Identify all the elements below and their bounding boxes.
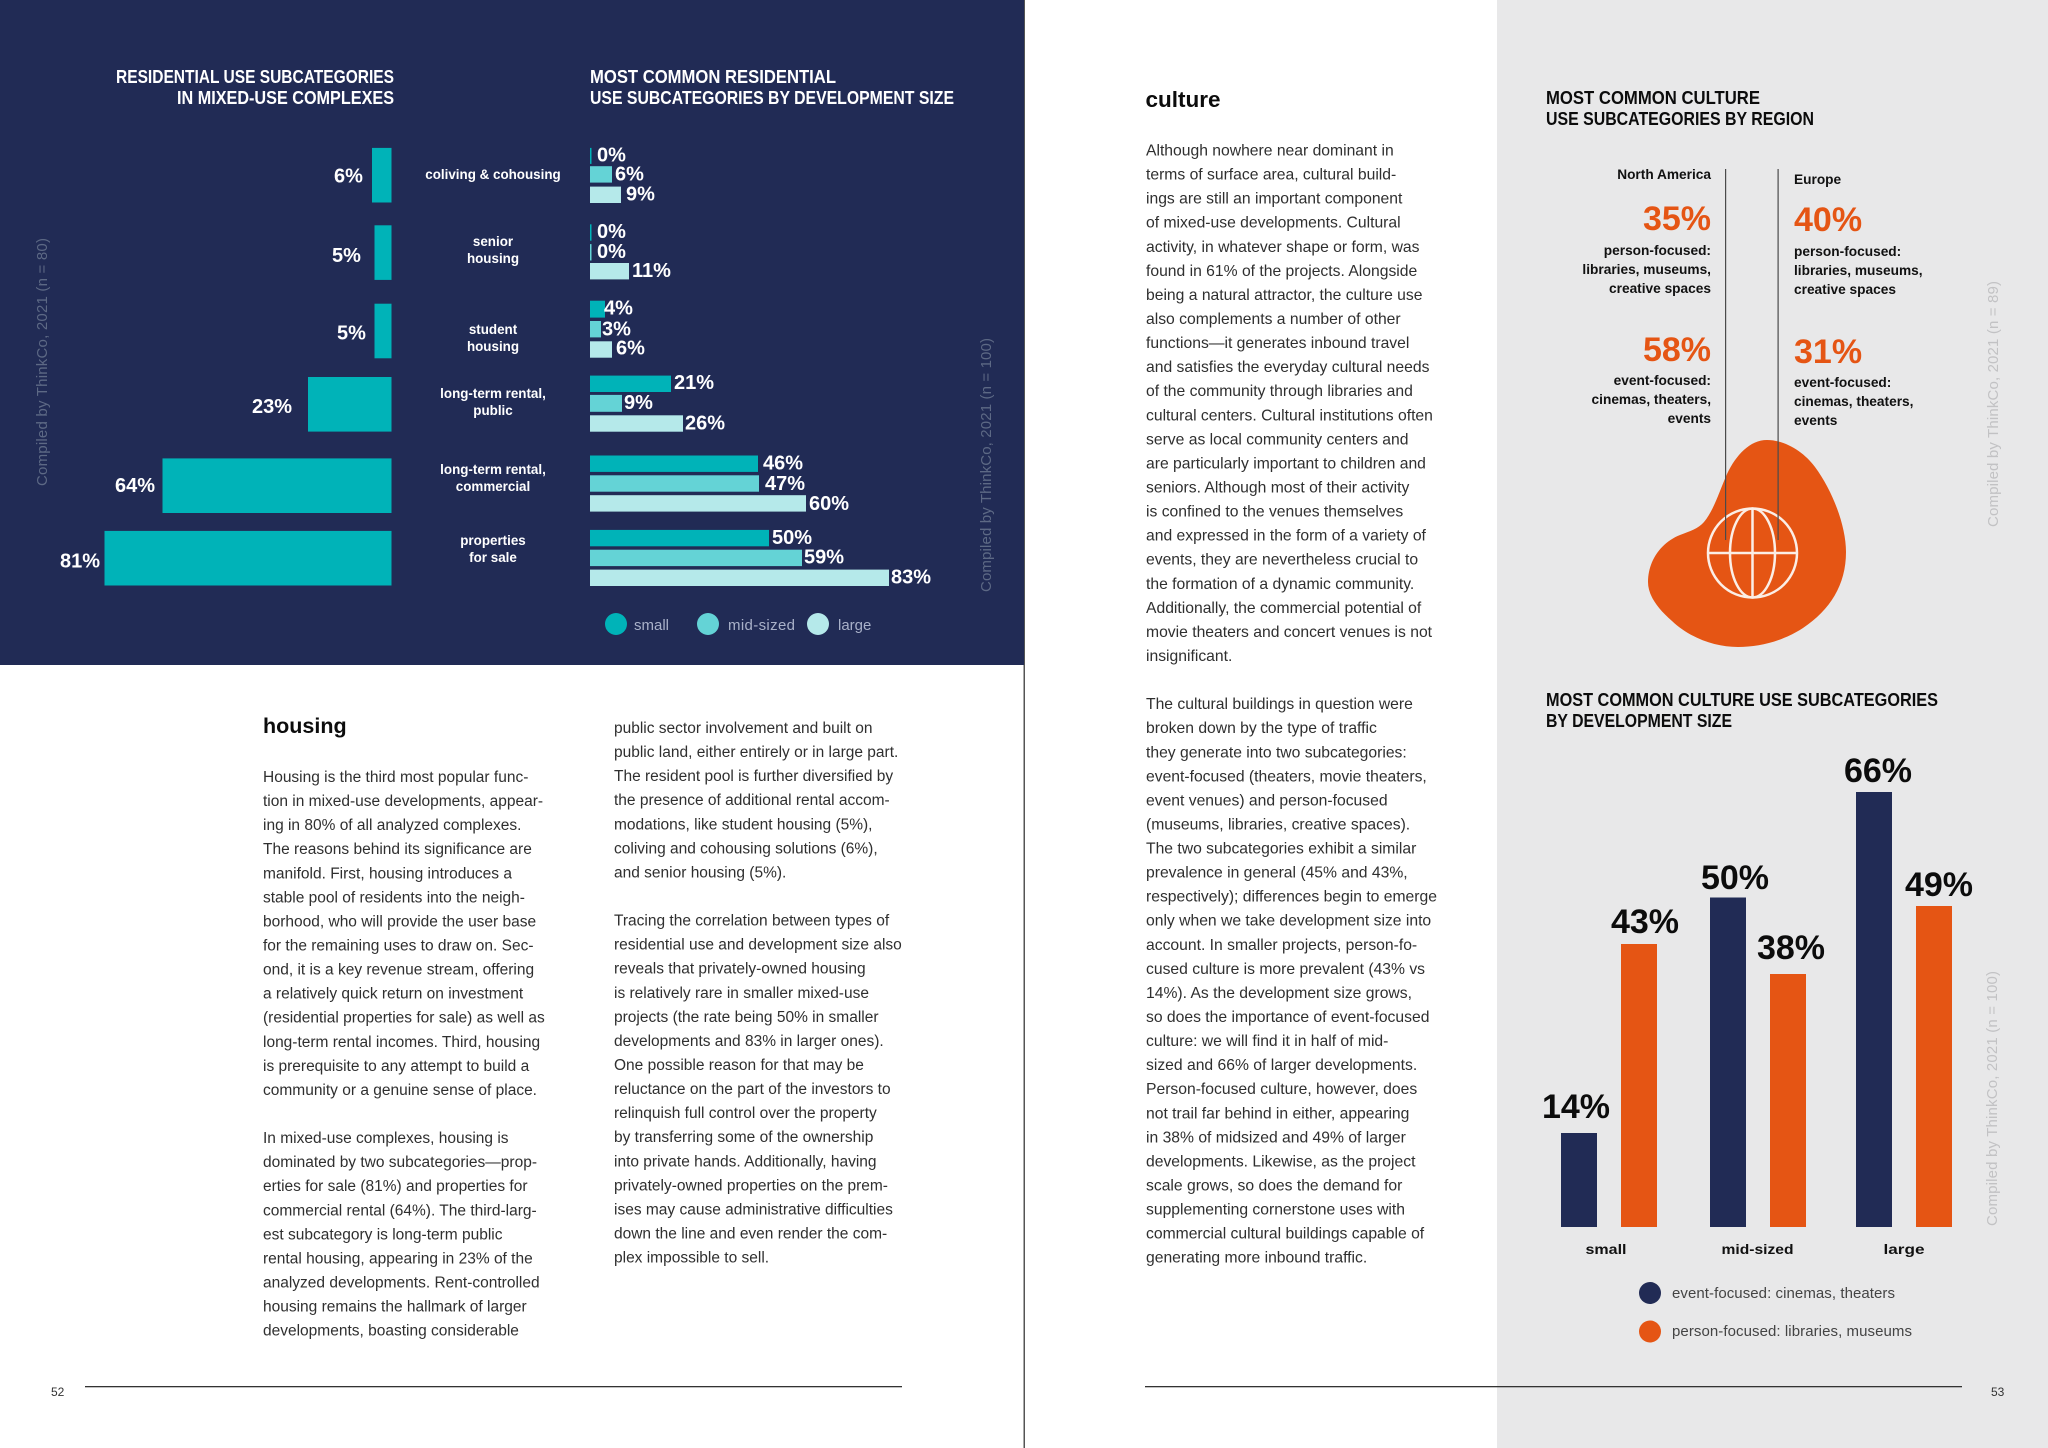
text block: housing first column: rental housing, appearing in 23% of the <box>263 1250 533 1267</box>
text block: housing first column: The reasons behind its significance are <box>263 841 532 858</box>
text block: housing first column: long-term rental incomes. Third, housing <box>263 1034 540 1051</box>
text block: culture: and expressed in the form of a variety of <box>1146 528 1427 545</box>
category labels: housing <box>467 339 519 354</box>
text block: housing first column: stable pool of residents into the neigh- <box>263 889 525 906</box>
text block: housing first column: housing remains the hallmark of larger <box>263 1299 527 1316</box>
panel: culture by development size <box>1542 690 2001 1342</box>
text block: housing second column: the presence of additional rental accom- <box>614 792 890 809</box>
column: North America: libraries, museums, <box>1582 262 1711 277</box>
grouped bar chart: by development size: 6% <box>616 337 645 359</box>
text block: culture: they generate into two subcategories: <box>1146 744 1407 761</box>
text block: housing second column: into private hands. Additionally, having <box>614 1153 877 1170</box>
footer right: page 53: 53 <box>1991 1385 2005 1399</box>
text block: culture: Person-focused culture, however, does <box>1146 1081 1417 1098</box>
text block: housing first column: manifold. First, housing introduces a <box>263 865 512 882</box>
column: North America: 35% <box>1643 200 1711 238</box>
column: North America: event-focused: <box>1614 373 1711 388</box>
text block: housing first column: community or a genuine sense of place. <box>263 1082 537 1099</box>
text block: culture: Additionally, the commercial potential of <box>1146 600 1422 617</box>
grouped bar chart: by development size: 60% <box>809 493 849 515</box>
text block: housing first column: commercial rental (64%). The third-larg- <box>263 1202 537 1219</box>
column: Europe: events <box>1794 413 1838 428</box>
source note: Compiled by ThinkCo, 2021 (n = 100) <box>1984 971 2001 1226</box>
text block: culture: sized and 66% of larger developments. <box>1146 1057 1417 1074</box>
bar chart: event vs person focused: 14% <box>1542 1088 1610 1126</box>
legend: development size: small <box>634 617 669 634</box>
grouped bar chart: by development size: 59% <box>804 547 844 569</box>
text block: culture: is confined to the venues themselves <box>1146 504 1403 521</box>
bar chart: residential subcategories overall: 5% <box>332 245 361 267</box>
column: Europe <box>1794 172 1923 428</box>
grouped bar chart: by development size: 0% <box>597 145 626 167</box>
grouped bar chart: by development size: 3% <box>602 318 631 340</box>
bar chart: event vs person focused: 66% <box>1844 752 1912 790</box>
text block: culture: developments. Likewise, as the project <box>1146 1153 1416 1170</box>
heading: culture: culture <box>1146 87 1221 112</box>
blob with globe icon <box>1648 440 1846 647</box>
grouped bar chart: by development size: 9% <box>626 183 655 205</box>
text block: housing second column: Tracing the correlation between types of <box>614 913 890 930</box>
text block: culture: account. In smaller projects, person-fo- <box>1146 937 1417 954</box>
legend: development size: large <box>838 617 871 634</box>
text block: culture: event-focused (theaters, movie theaters, <box>1146 768 1427 785</box>
text block: housing second column: privately-owned properties on the prem- <box>614 1177 888 1194</box>
grouped bar chart: by development size: 26% <box>685 413 725 435</box>
text block: culture: broken down by the type of traffic <box>1146 720 1377 737</box>
text block: housing second column: public land, either entirely or in large part. <box>614 744 898 761</box>
text block: culture: only when we take development size into <box>1146 913 1431 930</box>
text block: housing second column: by transferring some of the ownership <box>614 1129 873 1146</box>
grouped bar chart: by development size: 21% <box>674 372 714 394</box>
text block: culture: (museums, libraries, creative spaces). <box>1146 816 1410 833</box>
grouped bar chart: by development size: 4% <box>604 298 633 320</box>
heading: culture by development size <box>1546 690 1938 731</box>
text block: housing first column: ond, it is a key revenue stream, offering <box>263 962 534 979</box>
bar chart: event vs person focused: 38% <box>1757 929 1825 967</box>
text block: housing second column: coliving and cohousing solutions (6%), <box>614 840 878 857</box>
category labels: public <box>473 403 513 418</box>
text block: culture: the formation of a dynamic community. <box>1146 576 1414 593</box>
heading: by development size: USE SUBCATEGORIES BY DEVELOPMENT SIZE <box>590 88 954 108</box>
text block: housing second column: One possible reason for that may be <box>614 1057 864 1074</box>
column: Europe: event-focused: <box>1794 375 1891 390</box>
text block: culture: movie theaters and concert venues is not <box>1146 624 1433 641</box>
grouped bar chart: by development size: 9% <box>624 392 653 414</box>
bar chart: residential subcategories overall: 6% <box>334 166 363 188</box>
column: Europe: creative spaces <box>1794 282 1896 297</box>
bar chart: residential subcategories overall: 23% <box>252 396 292 418</box>
text block: culture: ings are still an important component <box>1146 191 1403 208</box>
text block: housing first column: for the remaining uses to draw on. Sec- <box>263 937 534 954</box>
bar chart: event vs person focused: small <box>1586 1241 1626 1257</box>
text block: housing second column: relinquish full control over the property <box>614 1105 877 1122</box>
grouped bar chart: by development size: 11% <box>632 260 671 282</box>
grouped bar chart: by development size: 0% <box>597 241 626 263</box>
text block: housing second column: public sector involvement and built on <box>614 720 872 737</box>
column: North America: events <box>1668 411 1711 426</box>
text block: culture: generating more inbound traffic. <box>1146 1250 1367 1267</box>
text block: culture: event venues) and person-focused <box>1146 792 1388 809</box>
text block: housing first column: erties for sale (81%) and properties for <box>263 1178 527 1195</box>
column: North America: 58% <box>1643 331 1711 369</box>
text block: culture: are particularly important to children and <box>1146 455 1426 472</box>
text block: housing first column: est subcategory is long-term public <box>263 1226 503 1243</box>
category labels: commercial <box>456 479 530 494</box>
text block: housing second column: developments and 83% in larger ones). <box>614 1033 884 1050</box>
grouped bar chart: by development size: 50% <box>772 527 812 549</box>
text block: culture: also complements a number of other <box>1146 311 1401 328</box>
text block: culture: activity, in whatever shape or form, was <box>1146 239 1420 256</box>
text block: culture: supplementing cornerstone uses with <box>1146 1202 1405 1219</box>
text block: housing first column: tion in mixed-use developments, appear- <box>263 793 543 810</box>
text block: housing second column: modations, like student housing (5%), <box>614 816 872 833</box>
text block: culture: commercial cultural buildings capable of <box>1146 1226 1425 1243</box>
text block: culture: The two subcategories exhibit a similar <box>1146 841 1416 858</box>
text block: culture: in 38% of midsized and 49% of larger <box>1146 1129 1406 1146</box>
text block: housing second column: residential use and development size also <box>614 937 902 954</box>
text block: culture: of mixed-use developments. Cultural <box>1146 215 1401 232</box>
heading: housing: housing <box>263 714 347 738</box>
column: North America: creative spaces <box>1609 281 1711 296</box>
category labels: properties <box>460 533 526 548</box>
text block: culture: found in 61% of the projects. Alongside <box>1146 263 1418 280</box>
panel: culture by region <box>1546 88 2002 647</box>
text block: culture: so does the importance of event-focused <box>1146 1009 1429 1026</box>
footer left: page 52: 52 <box>51 1385 65 1399</box>
category labels: long-term rental, <box>440 462 546 477</box>
text block: culture: serve as local community centers and <box>1146 431 1408 448</box>
column: Europe: libraries, museums, <box>1794 263 1923 278</box>
text block: housing first column: borhood, who will provide the user base <box>263 913 536 930</box>
category labels: senior <box>473 234 514 249</box>
panel: residential charts <box>0 0 1024 665</box>
category labels: housing <box>467 251 519 266</box>
column: Europe: cinemas, theaters, <box>1794 394 1913 409</box>
heading: residential use subcategories: RESIDENTIAL USE SUBCATEGORIES <box>116 67 394 87</box>
category labels: long-term rental, <box>440 386 546 401</box>
text block: housing first column: is prerequisite to any attempt to build a <box>263 1058 530 1075</box>
bar chart: residential subcategories overall <box>60 148 392 586</box>
heading: by development size: MOST COMMON RESIDENTIAL <box>590 67 836 87</box>
bar chart: event vs person focused: 49% <box>1905 866 1973 904</box>
legend: development size: mid-sized <box>728 617 795 634</box>
icon: globe <box>1708 508 1797 598</box>
column: North America: person-focused: <box>1604 243 1711 258</box>
legend: culture types: person-focused: libraries, museums <box>1672 1323 1912 1340</box>
grouped bar chart: by development size: 6% <box>615 164 644 186</box>
category labels <box>425 167 561 565</box>
source note: Compiled by ThinkCo, 2021 (n = 89) <box>1985 281 2002 527</box>
text block: culture: The cultural buildings in question were <box>1146 696 1413 713</box>
text block: housing second column: and senior housing (5%). <box>614 864 786 881</box>
bar chart: residential subcategories overall: 5% <box>337 322 366 344</box>
text block: culture: culture: we will find it in half of mid- <box>1146 1033 1388 1050</box>
text block: culture: seniors. Although most of their activity <box>1146 479 1409 496</box>
column: Europe: Europe <box>1794 172 1842 187</box>
bar chart: event vs person focused <box>1542 752 1973 1257</box>
bar chart: event vs person focused: 43% <box>1611 903 1679 941</box>
grouped bar chart: by development size: 0% <box>597 221 626 243</box>
text block: housing second column: down the line and even render the com- <box>614 1225 887 1242</box>
column: North America: North America <box>1617 167 1711 182</box>
heading: culture by region: MOST COMMON CULTURE <box>1546 88 1760 108</box>
column: Europe: 40% <box>1794 201 1862 239</box>
text block: housing second column: The resident pool is further diversified by <box>614 768 893 785</box>
legend: culture types: event-focused: cinemas, theaters <box>1672 1285 1895 1302</box>
column: North America <box>1582 167 1711 426</box>
text block: culture: not trail far behind in either, appearing <box>1146 1105 1409 1122</box>
text block: housing first column: analyzed developments. Rent-controlled <box>263 1274 540 1291</box>
source note right: Compiled by ThinkCo, 2021 (n = 100) <box>978 338 995 592</box>
text block: culture: Although nowhere near dominant in <box>1146 142 1394 160</box>
grouped bar chart: by development size: 46% <box>763 452 803 474</box>
text block: housing first column: ing in 80% of all analyzed complexes. <box>263 817 521 834</box>
category labels: coliving & cohousing <box>425 167 561 182</box>
heading: culture by development size: BY DEVELOPMENT SIZE <box>1546 711 1732 731</box>
bar chart: event vs person focused: mid-sized <box>1722 1241 1794 1257</box>
column: Europe: person-focused: <box>1794 244 1901 259</box>
text block: culture: events, they are nevertheless crucial to <box>1146 552 1418 569</box>
text block: housing first column: In mixed-use complexes, housing is <box>263 1130 509 1147</box>
heading: by development size <box>590 67 954 108</box>
text block: housing first column: (residential properties for sale) as well as <box>263 1010 545 1027</box>
text block: housing first column: dominated by two subcategories—prop- <box>263 1154 537 1171</box>
text block: housing first column: a relatively quick return on investment <box>263 986 524 1003</box>
heading: culture by development size: MOST COMMON CULTURE USE SUBCATEGORIES <box>1546 690 1938 710</box>
grouped bar chart: by development size <box>590 145 931 588</box>
text block: housing second column: ises may cause administrative difficulties <box>614 1201 893 1218</box>
bar chart: residential subcategories overall: 81% <box>60 551 100 573</box>
region dividers <box>1725 169 1779 540</box>
text block: housing second column: projects (the rate being 50% in smaller <box>614 1009 878 1026</box>
text block: culture: being a natural attractor, the culture use <box>1146 287 1423 304</box>
text block: culture: cultural centers. Cultural institutions often <box>1146 407 1433 424</box>
text block: culture: and satisfies the everyday cultural needs <box>1146 359 1430 376</box>
category labels: for sale <box>469 550 517 565</box>
text block: culture: terms of surface area, cultural build- <box>1146 167 1396 184</box>
grouped bar chart: by development size: 83% <box>891 566 931 588</box>
legend: development size <box>605 613 871 635</box>
text block: housing second column: plex impossible to sell. <box>614 1250 769 1267</box>
category labels: student <box>469 322 518 337</box>
heading: residential use subcategories <box>116 67 394 108</box>
bar chart: event vs person focused: 50% <box>1701 859 1769 897</box>
text block: culture: of the community through libraries and <box>1146 383 1413 400</box>
legend: culture types <box>1639 1282 1912 1342</box>
text block: housing second column: is relatively rare in smaller mixed-use <box>614 985 869 1002</box>
text block: housing first column: developments, boasting considerable <box>263 1323 519 1340</box>
heading: residential use subcategories: IN MIXED-USE COMPLEXES <box>177 88 394 108</box>
text block: housing second column: reveals that privately-owned housing <box>614 961 866 978</box>
grouped bar chart: by development size: 47% <box>765 473 805 495</box>
column: Europe: 31% <box>1794 333 1862 371</box>
text block: culture: prevalence in general (45% and 43%, <box>1146 865 1408 882</box>
text block: culture: cused culture is more prevalent (43% vs <box>1146 961 1425 978</box>
column: North America: cinemas, theaters, <box>1592 392 1711 407</box>
bar chart: residential subcategories overall: 64% <box>115 475 155 497</box>
text block: culture: 14%). As the development size grows, <box>1146 985 1412 1002</box>
text block: housing second column: reluctance on the part of the investors to <box>614 1081 891 1098</box>
heading: culture by region: USE SUBCATEGORIES BY REGION <box>1546 109 1814 129</box>
bar chart: event vs person focused: large <box>1884 1241 1925 1257</box>
text block: culture: functions—it generates inbound travel <box>1146 335 1409 352</box>
heading: culture by region <box>1546 88 1814 129</box>
source note left: Compiled by ThinkCo, 2021 (n = 80) <box>34 238 51 486</box>
text block: culture: respectively); differences begin to emerge <box>1146 889 1437 906</box>
text block: culture: insignificant. <box>1146 648 1232 665</box>
text block: housing first column: Housing is the third most popular func- <box>263 769 528 786</box>
text block: culture: scale grows, so does the demand for <box>1146 1178 1402 1195</box>
